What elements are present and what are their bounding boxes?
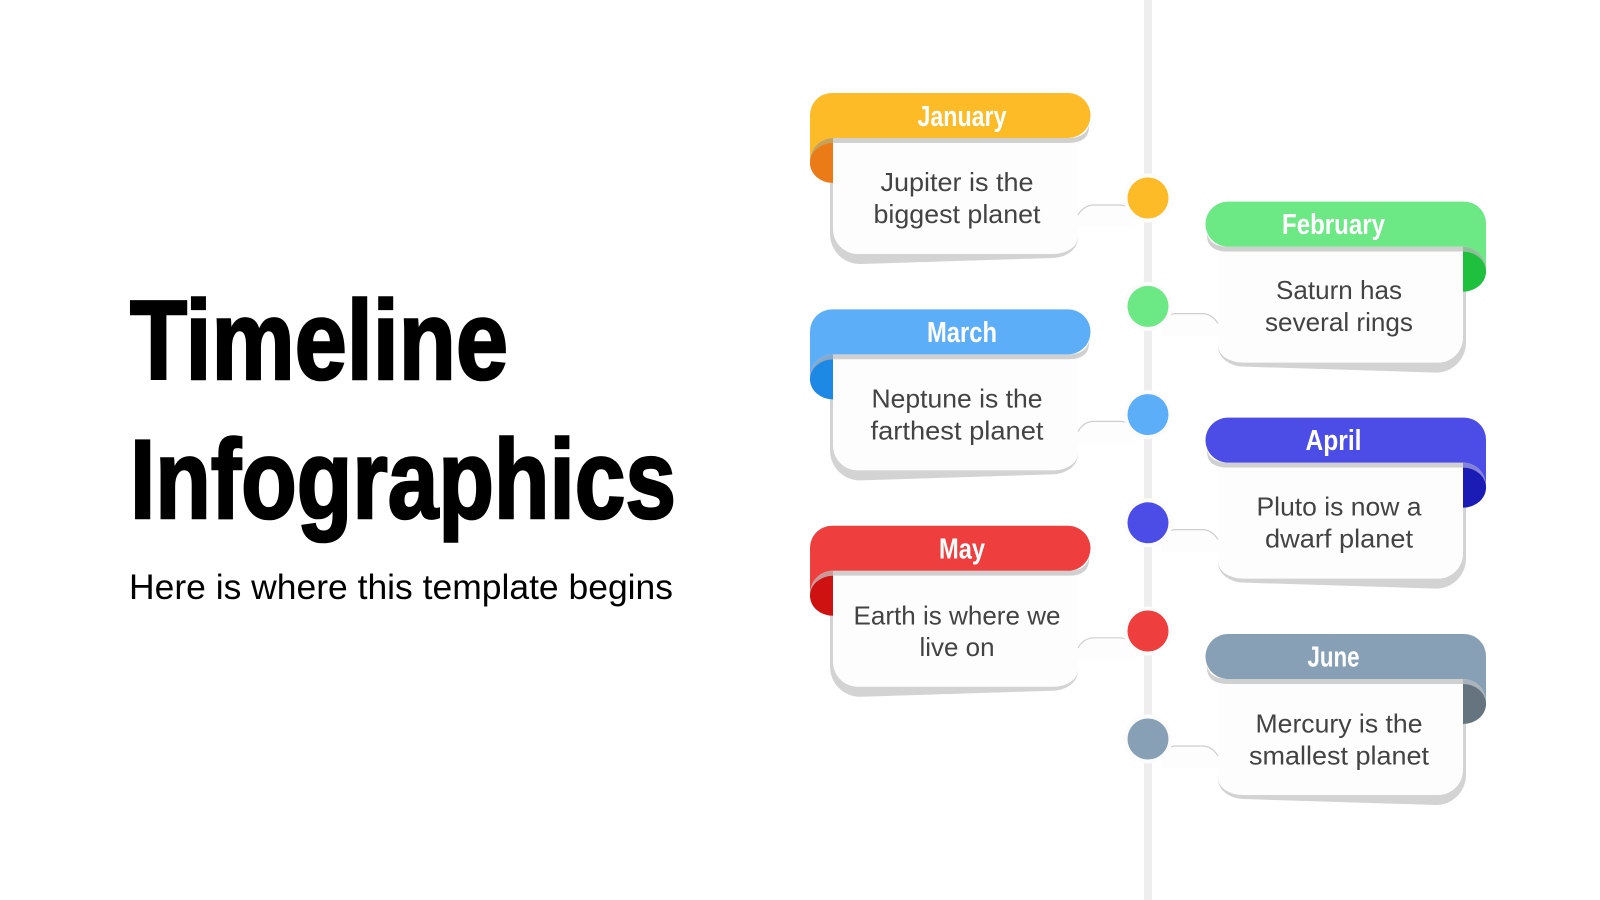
card: May: live on [920, 632, 994, 662]
card: January: January [918, 101, 1006, 133]
title [130, 278, 676, 542]
card: May: Earth is where we [854, 600, 1060, 630]
title: Infographics [130, 417, 676, 542]
card: February [1161, 202, 1486, 373]
card: April: dwarf planet [1265, 524, 1414, 554]
card: March: farthest planet [870, 415, 1044, 445]
card: January [810, 93, 1135, 264]
timeline dots [1124, 174, 1172, 764]
card: June: Mercury is the [1256, 709, 1422, 739]
card: February: several rings [1265, 307, 1413, 337]
timeline axis [1144, 0, 1152, 900]
card: March [810, 309, 1135, 480]
card: May: May [939, 533, 985, 565]
card: June: June [1308, 641, 1360, 673]
card: April: April [1306, 425, 1362, 457]
subtitle: Here is where this template begins [129, 568, 673, 607]
title: Timeline [130, 278, 508, 403]
card: January: biggest planet [874, 199, 1041, 229]
card: February: February [1282, 209, 1385, 241]
card: April: Pluto is now a [1256, 492, 1422, 522]
card: April [1161, 418, 1486, 589]
card: March: March [927, 317, 997, 349]
card: March: Neptune is the [872, 383, 1042, 413]
card: January: Jupiter is the [880, 167, 1034, 197]
card: June [1161, 634, 1486, 805]
card: June: smallest planet [1249, 740, 1430, 770]
card: May [810, 526, 1135, 697]
card: February: Saturn has [1276, 275, 1402, 305]
